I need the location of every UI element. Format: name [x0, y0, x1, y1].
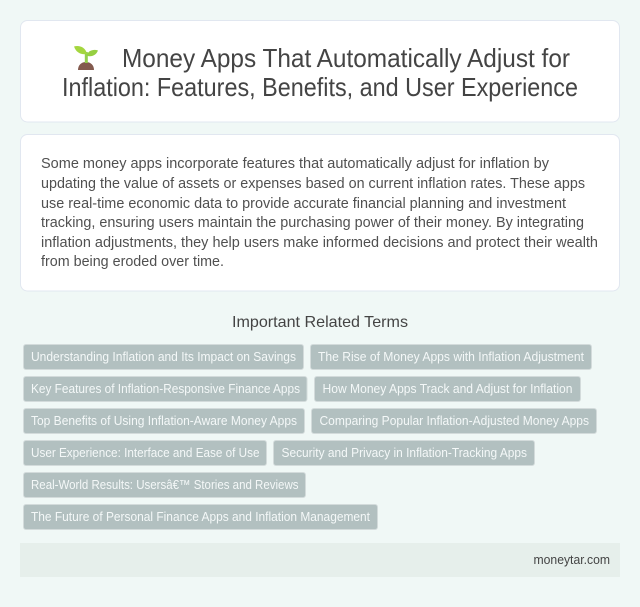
title: [62, 43, 578, 102]
tag: how apps track: How Money Apps Track and Adjust for Inflation: [322, 381, 572, 396]
tag: security and privacy: Security and Privacy in Inflation-Tracking Apps: [282, 445, 527, 460]
text block: introduction paragraph: from being eroded over time.: [41, 254, 224, 270]
tag: comparing apps: Comparing Popular Inflation-Adjusted Money Apps: [320, 413, 589, 428]
icon: seedling: [74, 46, 98, 70]
text block: introduction paragraph: inflation adjustments, they help users make informed decisions and protect their wealth: [41, 235, 598, 251]
tag: understanding inflation: [24, 344, 304, 370]
tag: user experience: [24, 440, 266, 466]
tag: rise of money apps: [310, 344, 592, 370]
footer: moneytar.com: [534, 552, 610, 567]
text block: introduction paragraph: updating the value of assets or expenses based on current inflation rates. These apps: [41, 176, 585, 192]
tag: security and privacy: [274, 440, 534, 466]
panel: header: [20, 20, 620, 122]
text block: introduction paragraph: [41, 156, 598, 270]
tag: rise of money apps: The Rise of Money Apps with Inflation Adjustment: [318, 349, 584, 364]
tag: top benefits: [24, 408, 304, 434]
heading: important related terms: Important Related Terms: [232, 314, 408, 331]
tag: user experience: User Experience: Interface and Ease of Use: [31, 445, 260, 460]
tag: future of personal finance: [24, 504, 378, 530]
footer: [20, 543, 620, 577]
tag: future of personal finance: The Future of Personal Finance Apps and Inflation Management: [31, 509, 370, 524]
text block: introduction paragraph: use real-time economic data to provide accurate financial planning and investment: [41, 196, 566, 212]
tag: how apps track: [314, 376, 580, 402]
text block: introduction paragraph: Some money apps incorporate features that automatically adjust for inflation by: [41, 156, 550, 172]
tag: key features: [24, 376, 307, 402]
panel: related term tags: [24, 344, 596, 530]
tag: top benefits: Top Benefits of Using Inflation-Aware Money Apps: [31, 413, 297, 428]
tag: comparing apps: [312, 408, 596, 434]
tag: real-world results: Real-World Results: Usersâ€™ Stories and Reviews: [31, 477, 298, 492]
tag: key features: Key Features of Inflation-Responsive Finance Apps: [31, 381, 300, 396]
tag: understanding inflation: Understanding Inflation and Its Impact on Savings: [31, 349, 296, 364]
title: Money Apps That Automatically Adjust for: [122, 43, 570, 73]
title: Inflation: Features, Benefits, and User Experience: [62, 72, 578, 102]
text block: introduction paragraph: tracking, ensuring users maintain the purchasing power of their money. By integrating: [41, 215, 584, 231]
panel: introduction: [20, 134, 620, 291]
tag: real-world results: [24, 472, 306, 498]
